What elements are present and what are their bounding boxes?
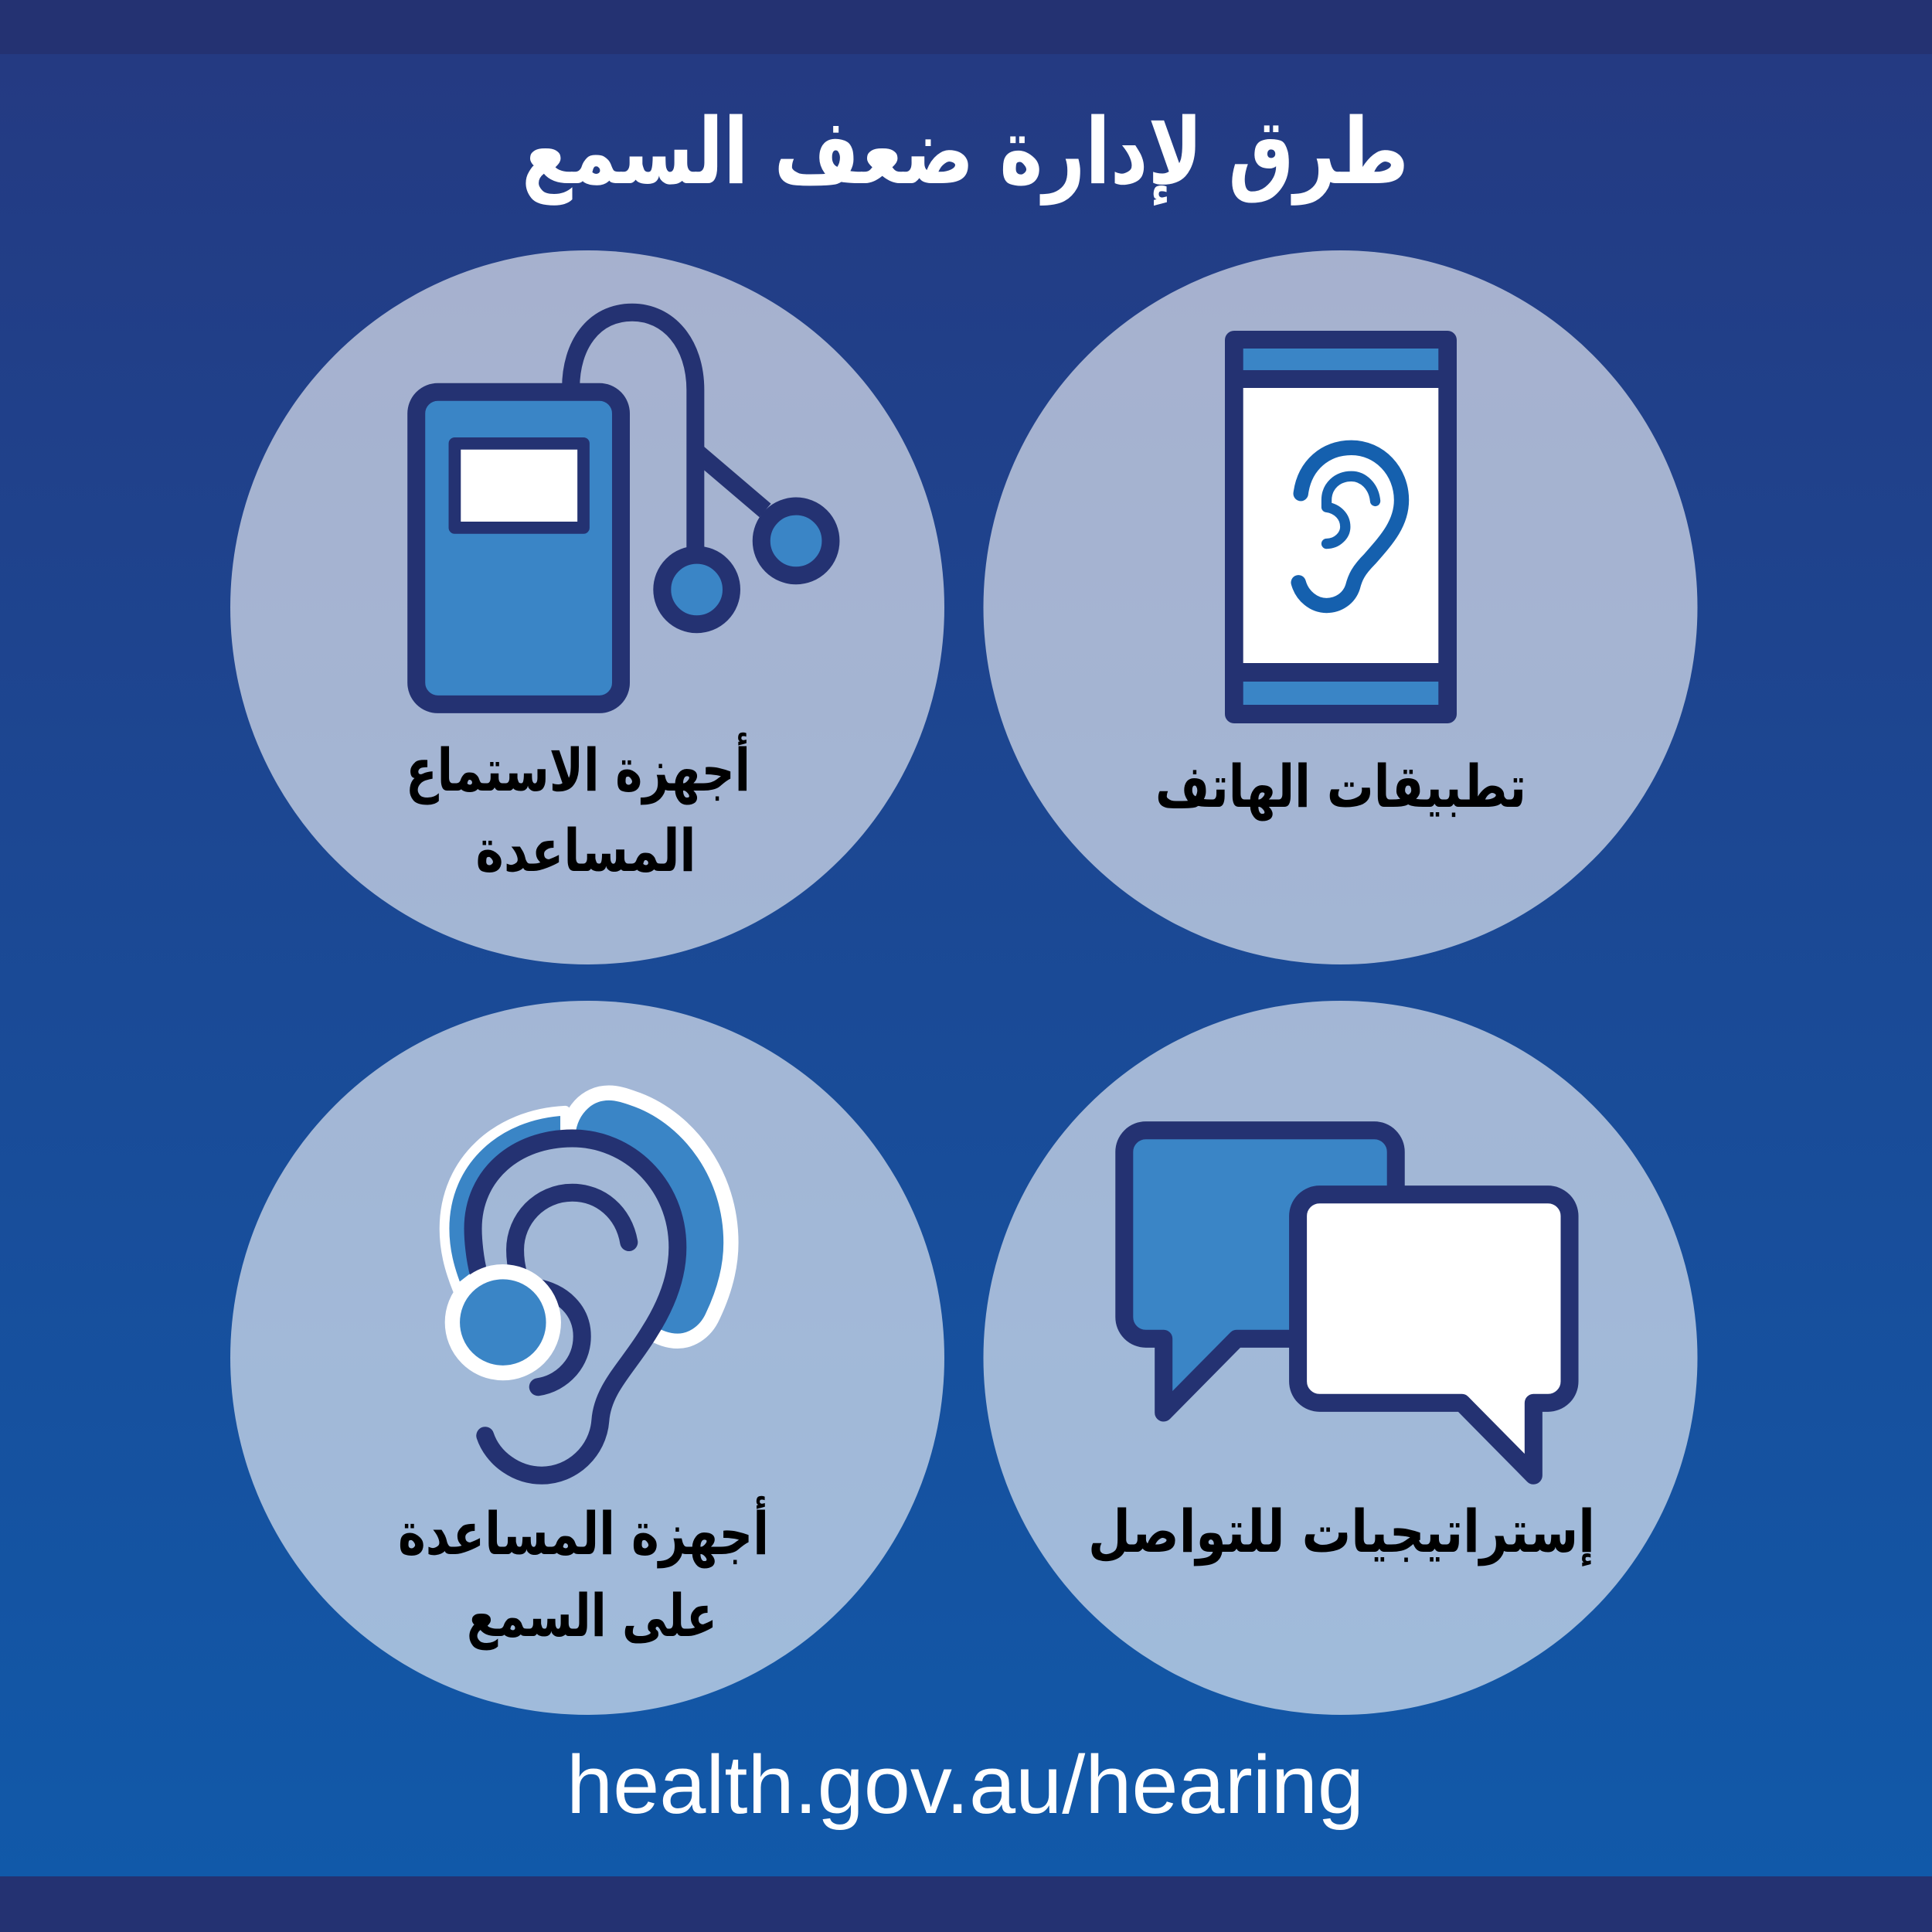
label: listening devices: أجهزة الاستماع [406, 732, 750, 805]
panel: phone apps [983, 250, 1697, 964]
label: phone apps: تطبيقات الهاتف [1155, 752, 1526, 821]
phone top band [1243, 349, 1438, 370]
phone body [1225, 331, 1457, 723]
inner ear [515, 1192, 629, 1276]
ear glyph [1298, 447, 1401, 606]
icon: hearing aid on ear [444, 1093, 731, 1475]
label: assistive: المساعدة [476, 816, 696, 885]
aid body left [444, 1111, 565, 1290]
label: communication strategies: إستراتيجيات للتواصل [1088, 1497, 1595, 1566]
title: طرق لإدارة ضعف السمع [522, 98, 1409, 206]
footer url: health.gov.au/hearing [566, 1738, 1364, 1831]
panel circle [230, 250, 944, 964]
panel: hearing assistive listening devices [230, 250, 944, 964]
icon: phone with ear [1225, 331, 1457, 723]
ear lobe curve [535, 1287, 582, 1387]
panel: communication strategies [983, 1001, 1697, 1715]
icon: speech bubbles [1124, 1131, 1570, 1475]
phone screen [1243, 388, 1438, 663]
panel circle [983, 250, 1697, 964]
label: hearing aids line two: على السمع [467, 1581, 717, 1651]
panel circle [983, 1001, 1697, 1715]
panel circle [230, 1001, 944, 1715]
receiver dome [452, 1272, 553, 1373]
outer ear [473, 1138, 678, 1475]
white speech bubble [1298, 1195, 1570, 1475]
blue speech bubble [1124, 1131, 1396, 1413]
aid body right [567, 1093, 731, 1341]
label: hearing aids line one: أجهزة المساعدة [398, 1495, 769, 1569]
top bar [0, 0, 1932, 54]
icon: listening device [417, 312, 831, 704]
phone bottom band [1243, 682, 1438, 705]
panel: hearing aids [230, 1001, 944, 1715]
bottom bar [0, 1876, 1932, 1932]
